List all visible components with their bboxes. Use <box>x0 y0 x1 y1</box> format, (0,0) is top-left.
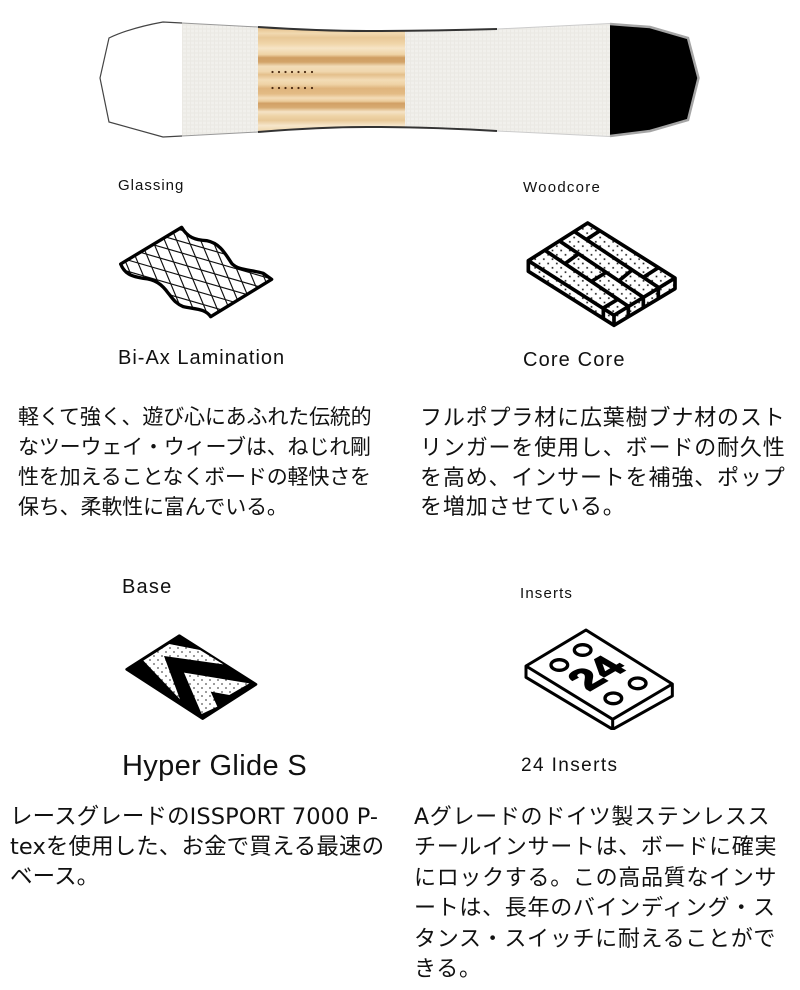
snowboard illustration <box>99 21 700 138</box>
heading: 24 Inserts: 24 Inserts <box>521 755 618 776</box>
label: Base: Base <box>122 576 172 598</box>
heading: Bi-Ax Lamination: Bi-Ax Lamination <box>118 347 285 369</box>
text: glassing description: 軽くて強く、遊び心にあふれた伝統的 <box>18 404 371 428</box>
text: inserts description <box>414 805 777 982</box>
icon: bi-ax glass weave <box>119 226 274 318</box>
icon: wood core block <box>526 221 677 328</box>
text: glassing description: なツーウェイ・ウィーブは、ねじれ剛 <box>18 435 371 459</box>
text: woodcore description: フルポプラ材に広葉樹ブナ材のスト <box>420 406 786 431</box>
text: inserts description: タンス・スイッチに耐えることがで <box>414 927 776 952</box>
text: inserts description: ートは、長年のバインディング・ス <box>414 896 776 921</box>
text: base description: レースグレードのISSPORT 7000 P- <box>10 804 378 830</box>
chevron shapes <box>143 644 249 714</box>
text: base description: texを使用した、お金で買える最速の <box>10 834 384 860</box>
text: woodcore description <box>420 406 786 520</box>
wood core section <box>258 28 405 131</box>
insert circles <box>551 645 646 704</box>
text: glassing description <box>18 404 371 519</box>
label: Inserts: Inserts <box>520 585 573 602</box>
text: woodcore description: を高め、インサートを補強、ポップ <box>420 466 786 491</box>
icon: 24 inserts plate <box>524 628 674 730</box>
text: glassing description: 保ち、柔軟性に富んでいる。 <box>18 495 288 519</box>
label: Glassing: Glassing <box>118 177 184 194</box>
number 24: 24 <box>557 650 636 696</box>
insert holes <box>271 71 313 89</box>
text: woodcore description: リンガーを使用し、ボードの耐久性 <box>420 436 786 461</box>
text: inserts description: Aグレードのドイツ製ステンレスス <box>414 805 770 830</box>
icon: base graphic <box>125 634 258 720</box>
label: Woodcore: Woodcore <box>523 179 601 196</box>
text: inserts description: チールインサートは、ボードに確実 <box>414 835 777 860</box>
text: woodcore description: を増加させている。 <box>420 495 626 520</box>
heading: Hyper Glide S: Hyper Glide S <box>122 750 307 782</box>
text: inserts description: きる。 <box>414 957 482 982</box>
text: inserts description: にロックする。この高品質なインサ <box>414 866 777 891</box>
text: base description <box>10 804 384 890</box>
text: base description: ベース。 <box>10 864 99 890</box>
heading: Core Core: Core Core <box>523 349 626 371</box>
text: glassing description: 性を加えることなくボードの軽快さを <box>18 465 371 489</box>
